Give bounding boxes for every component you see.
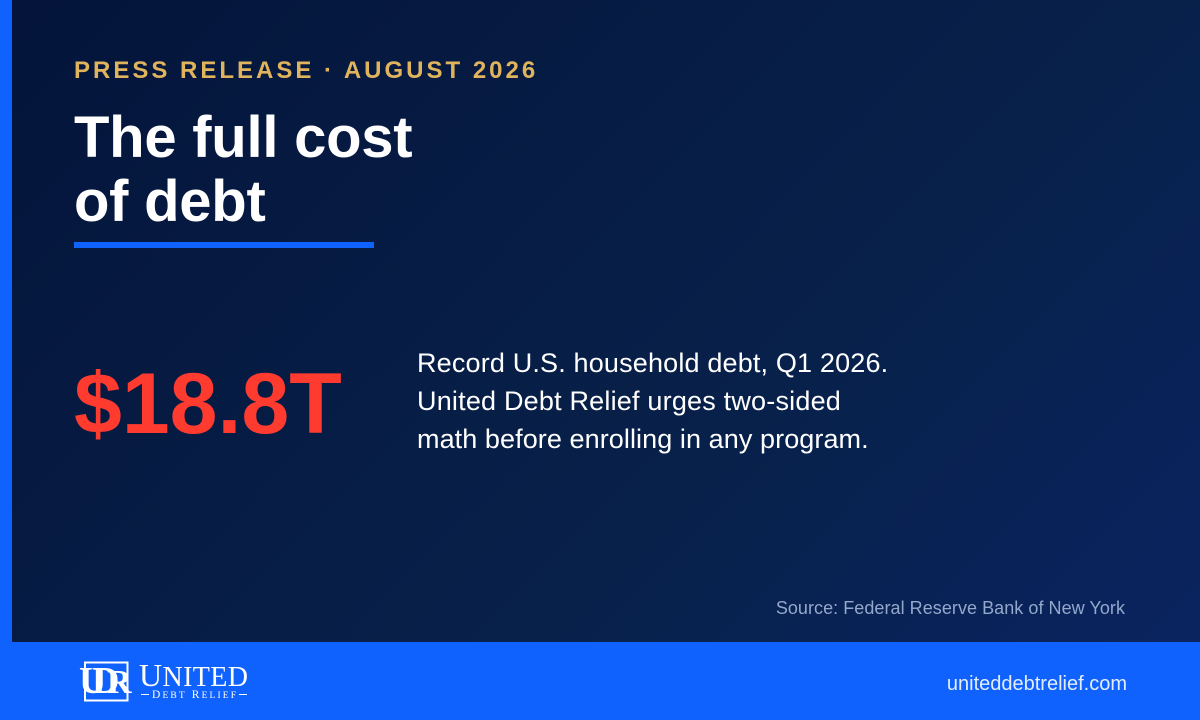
logo mark: D	[92, 660, 119, 702]
footer band	[0, 642, 1200, 720]
website url: uniteddebtrelief.com	[947, 673, 1127, 695]
logo mark: R	[107, 664, 132, 701]
title underline	[74, 242, 374, 248]
description	[417, 348, 888, 454]
title: The full cost	[74, 105, 412, 170]
eyebrow: PRESS RELEASE · AUGUST 2026	[74, 57, 538, 84]
source note: Source: Federal Reserve Bank of New York	[776, 598, 1125, 618]
logo wordmark: DEBT RELIEF	[152, 689, 236, 701]
logo wordmark: UNITED	[139, 657, 248, 693]
description: Record U.S. household debt, Q1 2026.	[417, 348, 888, 378]
logo mark	[79, 660, 132, 702]
description: math before enrolling in any program.	[417, 424, 869, 454]
title	[74, 105, 412, 234]
logo mark: U	[79, 660, 106, 702]
title: of debt	[74, 169, 266, 234]
left accent bar	[0, 0, 12, 720]
logo: United Debt Relief	[79, 657, 248, 702]
description: United Debt Relief urges two-sided	[417, 386, 841, 416]
big stat: $18.8T	[74, 356, 342, 452]
